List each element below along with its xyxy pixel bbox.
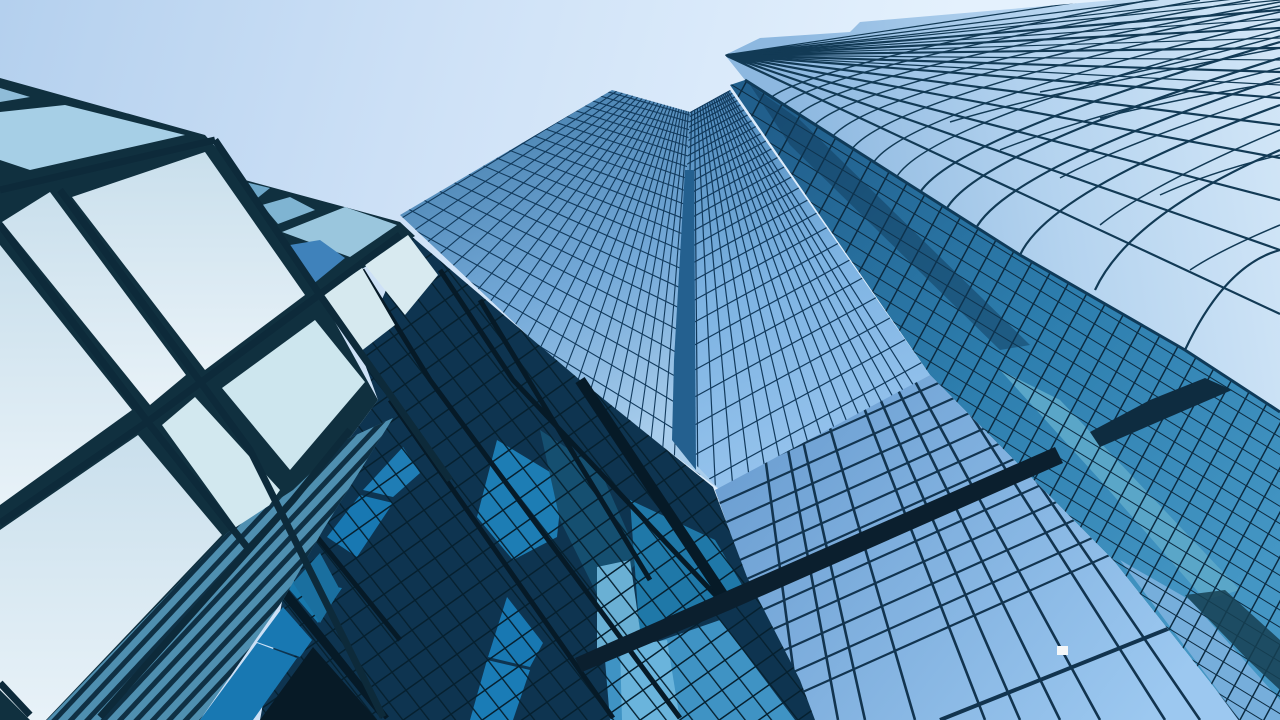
upper side panes bbox=[282, 207, 397, 257]
foreground frame mullions bbox=[0, 140, 450, 717]
pane middle bbox=[222, 320, 365, 470]
central notch shadow bbox=[672, 170, 696, 470]
pane top left bbox=[0, 105, 185, 170]
pane large bottom left bbox=[0, 435, 222, 720]
pane corner sliver bbox=[0, 88, 30, 102]
left building dark glass section bbox=[253, 235, 815, 720]
pane narrow middle bbox=[162, 397, 280, 540]
dark diagonal beam bbox=[580, 380, 725, 598]
lower left striped glazing bbox=[47, 418, 393, 720]
blue lower panes bbox=[200, 643, 297, 720]
dark mullions bbox=[253, 270, 720, 718]
dark horizontal beam bbox=[575, 447, 1063, 672]
central tower left face bbox=[400, 90, 718, 488]
lower right pale panes bbox=[1120, 560, 1280, 720]
window light bbox=[1057, 646, 1068, 655]
dark horizontal band bbox=[1090, 378, 1232, 447]
pane large left bbox=[0, 245, 132, 505]
right tower upper light panes bbox=[725, 0, 1280, 412]
left building frame bbox=[0, 78, 438, 720]
lower podium lattice bbox=[715, 375, 1240, 720]
dense dark reflection bbox=[750, 85, 1030, 350]
blue panes bbox=[363, 447, 420, 497]
central tower right face bbox=[672, 90, 930, 488]
corner edge line bbox=[745, 80, 1280, 412]
right tower dark reflecting face bbox=[730, 80, 1280, 720]
dark lower right block bbox=[1185, 590, 1280, 690]
pane tall upper bbox=[72, 152, 305, 370]
teal reflection band bbox=[1000, 370, 1240, 600]
black shadow block bbox=[260, 647, 377, 720]
pane narrow left bbox=[2, 192, 186, 405]
